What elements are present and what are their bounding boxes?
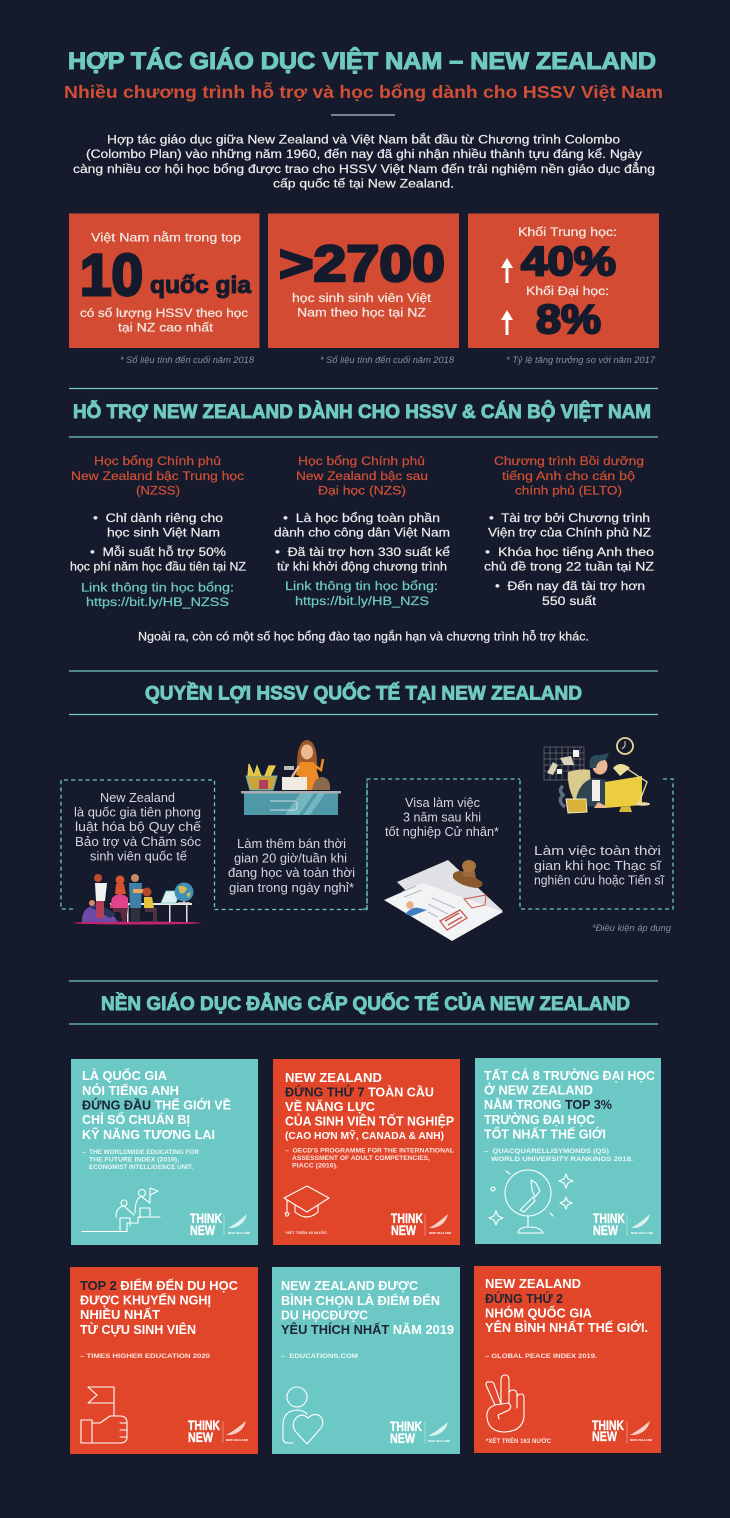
panel: top 10 stat: tại NZ cao nhất <box>118 320 214 334</box>
panel: full-time work for research students <box>520 738 673 933</box>
logo: Think New: THINK <box>592 1417 624 1433</box>
icon: peace hand <box>486 1375 524 1432</box>
logo: Think New <box>593 1210 654 1238</box>
card: peace index: *XÉT TRÊN 163 NƯỚC <box>486 1437 552 1445</box>
card: alumni recommendation <box>70 1267 258 1454</box>
panel: 2700 students stat: học sinh sinh viên Việt <box>292 291 432 305</box>
illustration: man working at computer <box>544 738 650 813</box>
logo: Think New: NEW ZEALAND <box>226 1438 249 1442</box>
panel: top 10 stat <box>69 214 260 348</box>
icon: globe with New Zealand <box>489 1170 573 1233</box>
logo: Think New <box>190 1210 251 1238</box>
panel: growth stat <box>468 214 659 348</box>
panel: growth stat: 40% <box>521 238 616 284</box>
logo: Think New: NEW <box>190 1222 216 1238</box>
panel: ELTO programme: 550 suất <box>542 594 597 608</box>
logo: Think New: THINK <box>390 1418 422 1434</box>
logo: Think New: THINK <box>593 1210 625 1226</box>
card: favourite destination: YÊU THÍCH NHẤT NĂM 2019 <box>281 1322 454 1337</box>
arrow: up tertiary <box>501 310 513 335</box>
card: future skills index: ĐỨNG ĐẦU THẾ GIỚI VỀ <box>82 1098 231 1112</box>
logo: Think New: NEW ZEALAND <box>630 1438 653 1442</box>
panel: student care code: Bảo trợ và Chăm sóc <box>75 834 202 849</box>
card: university rankings: Ở NEW ZEALAND <box>484 1082 593 1098</box>
heading: support section: HỖ TRỢ NEW ZEALAND DÀNH CHO HSSV & CÁN BỘ VIỆT NAM <box>73 399 651 423</box>
logo: Think New: THINK <box>188 1417 220 1433</box>
card: adult competencies: *XÉT TRÊN 40 NƯỚC <box>285 1230 327 1235</box>
card: peace index <box>474 1266 661 1453</box>
panel: post-study work visa: tốt nghiệp Cử nhân* <box>385 824 499 839</box>
card: favourite destination: – EDUCATIONS.COM <box>281 1353 358 1360</box>
panel: top 10 stat: 10 <box>80 243 143 308</box>
card: peace index: – GLOBAL PEACE INDEX 2019. <box>485 1353 597 1360</box>
card: peace index: NEW ZEALAND <box>485 1276 581 1291</box>
card: university rankings: WORLD UNIVERSITY RANKINGS 2018. <box>491 1156 633 1163</box>
title: HỢP TÁC GIÁO DỤC VIỆT NAM – NEW ZEALAND <box>68 47 656 75</box>
card: favourite destination: DU HỌCĐƯỢC <box>281 1308 368 1322</box>
logo: Think New <box>391 1210 452 1238</box>
intro text: (Colombo Plan) vào những năm 1960, đến nay đã ghi nhận nhiều thành tựu đáng kể. Ngày <box>86 147 643 161</box>
panel: ELTO programme <box>484 454 655 608</box>
panel: NZS scholarship <box>274 454 450 608</box>
panel: NZS scholarship: Link thông tin học bổng: <box>285 579 438 593</box>
panel: ELTO programme: chủ đề trong 22 tuần tại NZ <box>484 560 655 574</box>
card: alumni recommendation: TOP 2 ĐIỂM ĐẾN DU HỌC <box>80 1278 238 1293</box>
panel: NZSS scholarship: • Mỗi suất hỗ trợ 50% <box>90 544 226 559</box>
card: adult competencies <box>273 1059 460 1245</box>
panel: NZSS scholarship: Học bổng Chính phủ <box>94 454 221 468</box>
panel: ELTO programme: chính phủ (ELTO) <box>515 484 622 498</box>
panel: NZSS scholarship: • Chỉ dành riêng cho <box>93 511 223 525</box>
card: future skills index: – THE WORLDWIDE EDUCATING FOR <box>82 1149 200 1156</box>
panel: NZS scholarship: https://bit.ly/HB_NZS <box>295 594 429 608</box>
icon: graduation cap <box>284 1186 329 1217</box>
panel: NZSS scholarship: https://bit.ly/HB_NZSS <box>86 595 229 609</box>
panel: part-time work: gian 20 giờ/tuần khi <box>234 850 347 866</box>
panel: NZSS scholarship <box>70 454 247 609</box>
card: adult competencies: PIACC (2016). <box>292 1162 338 1170</box>
card: university rankings: NẰM TRONG TOP 3% <box>484 1097 613 1112</box>
panel: student care code: luật hóa bộ Quy chế <box>75 819 202 834</box>
note: other scholarships: Ngoài ra, còn có một số học bổng đào tạo ngắn hạn và chương trình hỗ trợ khác. <box>138 628 589 644</box>
panel: NZS scholarship: Đại học (NZS) <box>318 484 406 498</box>
logo: Think New: NEW <box>391 1222 417 1238</box>
panel: ELTO programme: tiếng Anh cho cán bộ <box>502 469 635 483</box>
panel: ELTO programme: • Khóa học tiếng Anh theo <box>485 545 654 559</box>
card: peace index: ĐỨNG THỨ 2 <box>485 1291 563 1306</box>
logo: Think New: NEW ZEALAND <box>228 1231 251 1235</box>
logo: Think New <box>592 1417 653 1444</box>
card: alumni recommendation: TỪ CỰU SINH VIÊN <box>80 1322 196 1337</box>
card: alumni recommendation: – TIMES HIGHER EDUCATION 2020 <box>80 1353 211 1360</box>
card: adult competencies: NEW ZEALAND <box>285 1070 382 1085</box>
panel: full-time work for research students: Làm việc toàn thời <box>534 843 661 858</box>
logo: Think New <box>188 1417 249 1445</box>
panel: NZSS scholarship: học sinh Việt Nam <box>107 526 220 540</box>
card: adult competencies: ASSESSMENT OF ADULT COMPETENCIES, <box>292 1155 430 1162</box>
logo: Think New: NEW ZEALAND <box>631 1231 654 1235</box>
panel: 2700 students stat <box>268 214 459 348</box>
icon: person with heart <box>283 1387 323 1444</box>
panel: growth stat: Khối Đại học: <box>526 284 609 298</box>
panel: top 10 stat: có số lượng HSSV theo học <box>80 306 248 320</box>
panel: ELTO programme: • Tài trợ bởi Chương trình <box>489 511 650 525</box>
intro text: Hợp tác giáo dục giữa New Zealand và Việt Nam bắt đầu từ Chương trình Colombo <box>107 132 620 146</box>
logo: Think New: THINK <box>391 1210 423 1226</box>
panel: ELTO programme: • Đến nay đã tài trợ hơn <box>495 579 645 593</box>
panel: full-time work for research students: *Điều kiện áp dụng <box>592 923 671 933</box>
card: favourite destination: BÌNH CHỌN LÀ ĐIỂM ĐẾN <box>281 1293 440 1308</box>
card: university rankings: TỐT NHẤT THẾ GIỚI <box>484 1126 606 1142</box>
card: future skills index: KỸ NĂNG TƯƠNG LAI <box>82 1127 215 1142</box>
intro text: cấp quốc tế tại New Zealand. <box>273 176 454 190</box>
subtitle: Nhiều chương trình hỗ trợ và học bổng dành cho HSSV Việt Nam <box>64 81 663 102</box>
panel: post-study work visa <box>360 779 520 941</box>
illustration: cashier at counter <box>241 740 341 815</box>
logo: Think New: NEW ZEALAND <box>428 1439 451 1443</box>
panel: post-study work visa: Visa làm việc <box>405 795 480 810</box>
footnotes under stats: * Số liệu tính đến cuối năm 2018 <box>320 355 454 365</box>
panel: NZS scholarship: • Đã tài trợ hơn 330 suất kể <box>275 545 450 559</box>
card: future skills index <box>71 1059 258 1245</box>
panel: NZSS scholarship: Link thông tin học bổng: <box>81 580 234 594</box>
panel: part-time work: Làm thêm bán thời <box>237 836 346 851</box>
card: future skills index: LÀ QUỐC GIA <box>82 1068 167 1083</box>
illustration: students around a desk <box>73 874 201 924</box>
footnotes under stats: * Số liệu tính đến cuối năm 2018 <box>120 355 254 365</box>
card: adult competencies: – OECD'S PROGRAMME FOR THE INTERNATIONAL <box>285 1148 454 1154</box>
panel: NZS scholarship: Học bổng Chính phủ <box>298 454 425 468</box>
card: future skills index: THE FUTURE INDEX (2019), <box>89 1156 179 1164</box>
panel: student care code: sinh viên quốc tế <box>90 848 188 864</box>
panel: ELTO programme: Viện trợ của Chính phủ NZ <box>488 526 652 540</box>
card: adult competencies: (CAO HƠN MỸ, CANADA & ANH) <box>285 1129 444 1142</box>
panel: part-time work: gian trong ngày nghỉ* <box>229 880 354 895</box>
intro text <box>73 132 655 190</box>
footnotes under stats <box>120 355 656 365</box>
logo: Think New: NEW <box>188 1429 214 1445</box>
panel: top 10 stat: Việt Nam nằm trong top <box>91 230 241 244</box>
logo: Think New: NEW <box>390 1430 416 1446</box>
card: future skills index: NÓI TIẾNG ANH <box>82 1083 179 1098</box>
footnotes under stats: * Tỷ lệ tăng trưởng so với năm 2017 <box>506 355 656 365</box>
heading: student rights section: QUYỀN LỢI HSSV QUỐC TẾ TẠI NEW ZEALAND <box>145 680 582 704</box>
panel: NZS scholarship: New Zealand bậc sau <box>296 469 428 483</box>
logo: Think New: THINK <box>190 1210 222 1226</box>
panel: part-time work: đang học và toàn thời <box>228 865 355 880</box>
card: peace index: NHÓM QUỐC GIA <box>485 1306 592 1320</box>
card: university rankings: TẤT CẢ 8 TRƯỜNG ĐẠI HỌC <box>484 1068 655 1083</box>
panel: NZSS scholarship: học phí năm học đầu tiên tại NZ <box>70 560 247 574</box>
panel: student care code <box>61 780 214 924</box>
logo: Think New <box>390 1418 451 1446</box>
card: favourite destination: NEW ZEALAND ĐƯỢC <box>281 1278 418 1293</box>
icon: hand holding flag <box>81 1387 127 1443</box>
panel: post-study work visa: 3 năm sau khi <box>403 810 481 824</box>
panel: 2700 students stat: >2700 <box>279 235 445 292</box>
illustration: stamped visa documents <box>384 860 503 941</box>
panel: NZSS scholarship: New Zealand bậc Trung học <box>71 469 244 483</box>
panel: growth stat: 8% <box>536 296 601 342</box>
card: adult competencies: VỀ NĂNG LỰC <box>285 1099 375 1114</box>
card: peace index: YÊN BÌNH NHẤT THẾ GIỚI. <box>485 1320 648 1335</box>
panel: NZS scholarship: • Là học bổng toàn phần <box>283 511 440 525</box>
intro text: càng nhiều cơ hội học bổng được trao cho HSSV Việt Nam đến trải nghiệm nền giáo dục đẳng <box>73 161 655 176</box>
panel: 2700 students stat: Nam theo học tại NZ <box>297 306 427 320</box>
heading: world-class education section: NỀN GIÁO DỤC ĐẲNG CẤP QUỐC TẾ CỦA NEW ZEALAND <box>101 991 630 1015</box>
card: university rankings: – QUACQUARELLISYMONDS (QS) <box>484 1148 609 1155</box>
card: university rankings: TRƯỜNG ĐẠI HỌC <box>484 1112 595 1127</box>
card: future skills index: CHỈ SỐ CHUẨN BỊ <box>82 1112 190 1127</box>
card: university rankings <box>475 1058 661 1244</box>
card: future skills index: ECONOMIST INTELLIGENCE UNIT. <box>89 1164 193 1171</box>
panel: top 10 stat: quốc gia <box>150 272 252 299</box>
panel: NZSS scholarship: (NZSS) <box>136 484 180 498</box>
card: adult competencies: CỦA SINH VIÊN TỐT NGHIỆP <box>285 1114 454 1128</box>
panel: growth stat: Khối Trung học: <box>518 225 617 239</box>
panel: student care code: là quốc gia tiên phong <box>74 804 201 820</box>
card: favourite destination <box>272 1267 460 1454</box>
panel: NZS scholarship: dành cho công dân Việt Nam <box>274 526 450 540</box>
arrow: up secondary <box>501 258 513 283</box>
panel: ELTO programme: Chương trình Bồi dưỡng <box>494 454 644 468</box>
logo: Think New: NEW <box>592 1428 618 1444</box>
panel: part-time work <box>214 740 367 910</box>
card: adult competencies: ĐỨNG THỨ 7 TOÀN CẦU <box>285 1084 434 1100</box>
panel: full-time work for research students: gian khi học Thạc sĩ <box>534 858 663 873</box>
panel: full-time work for research students: nghiên cứu hoặc Tiến sĩ <box>534 872 665 888</box>
panel: student care code: New Zealand <box>100 790 175 805</box>
logo: Think New: NEW <box>593 1222 619 1238</box>
logo: Think New: NEW ZEALAND <box>429 1231 452 1235</box>
panel: NZS scholarship: từ khi khởi động chương trình <box>277 560 447 574</box>
icon: people climbing steps <box>82 1188 160 1232</box>
card: alumni recommendation: ĐƯỢC KHUYẾN NGHỊ <box>80 1292 211 1308</box>
card: alumni recommendation: NHIỀU NHẤT <box>80 1307 160 1322</box>
